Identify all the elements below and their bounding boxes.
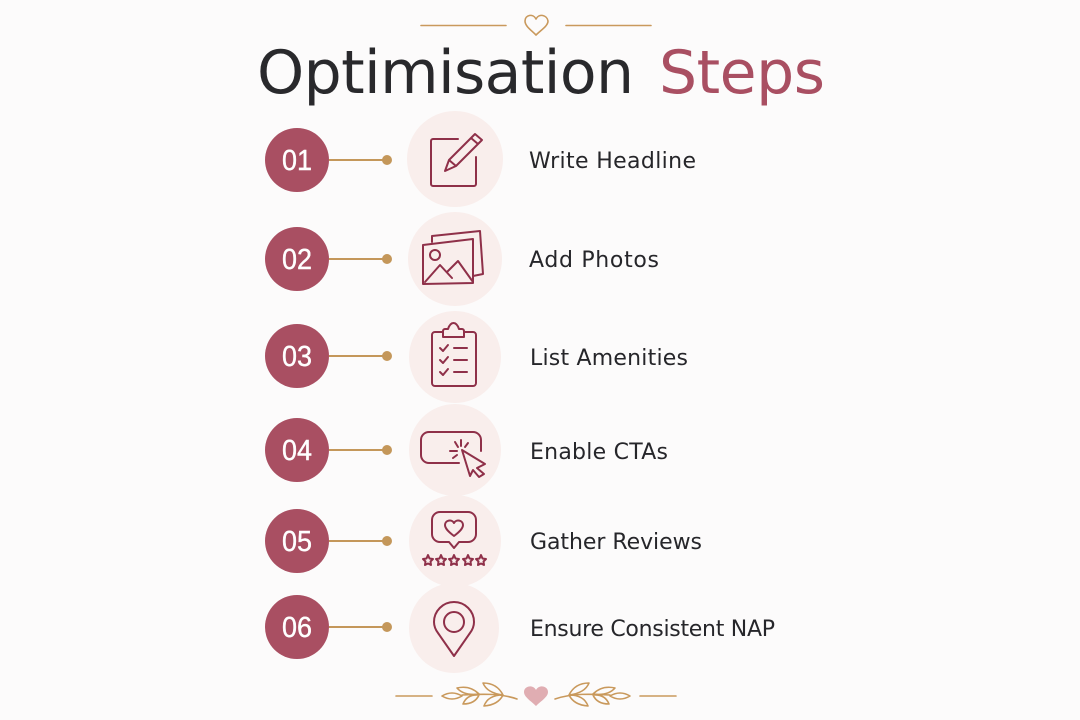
label 03: List Amenities: [530, 346, 688, 371]
icon: map pin: [409, 583, 499, 673]
step 06: ensure consistent NAP: [265, 583, 775, 673]
label 02: Add Photos: [529, 248, 659, 273]
step 02: add photos: [265, 212, 659, 306]
icon: photos: [408, 212, 502, 306]
footer ornament: laurels and heart: [396, 683, 676, 706]
step 05: gather reviews: [265, 495, 702, 587]
label 04: Enable CTAs: [530, 440, 668, 465]
number badge 04: [265, 418, 329, 482]
step 03: list amenities: [265, 311, 688, 403]
label 01: Write Headline: [529, 149, 696, 174]
label 05: Gather Reviews: [530, 530, 702, 555]
icon: pencil on notepad: [407, 111, 503, 207]
number badge 01: [265, 128, 329, 192]
number badge 03: 03: [282, 341, 312, 373]
title: Optimisation: [257, 38, 634, 108]
title: [257, 38, 825, 108]
number badge 06: [265, 595, 329, 659]
number badge 05: [265, 509, 329, 573]
number badge 02: 02: [282, 244, 312, 276]
step 01: write headline: [265, 111, 696, 207]
number badge 06: 06: [282, 612, 312, 644]
connector 04: [329, 445, 392, 455]
connector 03: [329, 351, 392, 361]
icon: clipboard checklist: [409, 311, 501, 403]
title: Steps: [659, 38, 825, 108]
number badge 02: [265, 227, 329, 291]
top ornament: lines and heart: [421, 15, 651, 35]
connector 02: [329, 254, 392, 264]
step 04: enable CTAs: [265, 404, 668, 496]
icon: speech bubble with heart and stars: [409, 495, 501, 587]
number badge 01: 01: [282, 145, 312, 177]
number badge 04: 04: [282, 435, 312, 467]
connector 01: [329, 155, 392, 165]
connector 05: [329, 536, 392, 546]
number badge 05: 05: [282, 526, 312, 558]
number badge 03: [265, 324, 329, 388]
connector 06: [329, 622, 392, 632]
icon: button with cursor: [409, 404, 501, 496]
label 06: Ensure Consistent NAP: [530, 617, 775, 642]
